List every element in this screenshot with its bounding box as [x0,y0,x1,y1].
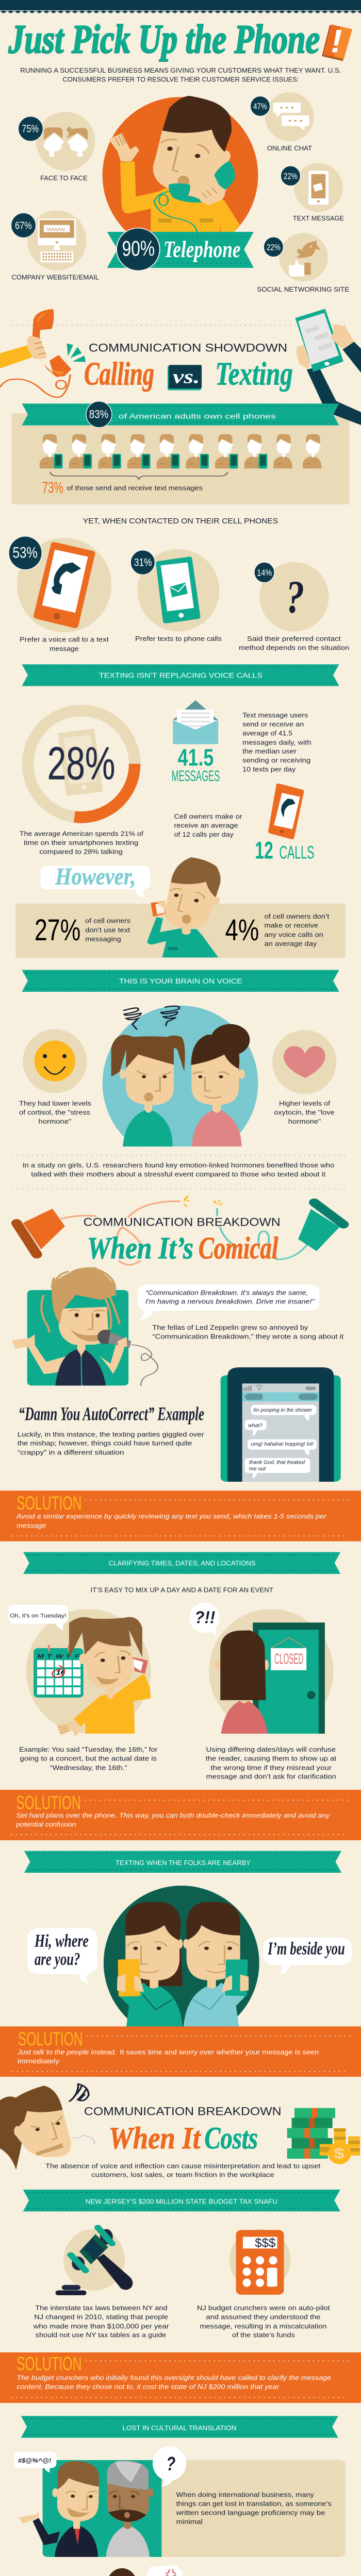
stat: 4%: 4% [225,913,259,947]
speech bubble: however [41,863,150,897]
ribbon: lost in cultural translation [21,2416,338,2438]
panel: non-users [15,904,346,958]
text: cell owners 12 calls: receive an average [174,822,238,829]
text: messages daily: 10 texts per day [242,766,296,773]
stat: 73% send and receive text: of those send and receive text messages [67,485,203,492]
text: differing dates [206,1746,337,1781]
icon: stress scribble left [123,1008,141,1029]
heading: communication breakdown costs: COMMUNICATION BREAKDOWN [84,2105,282,2118]
stat: 27%: of cell owners [85,918,130,925]
chart: 28% ring [22,705,140,823]
ribbon: new jersey snafu [23,2190,340,2211]
caption: depends on situation: Said their preferred contact [247,635,341,642]
text: messages daily: send or receive an [242,721,304,728]
text: MESSAGES [172,768,220,785]
caption: prefer a voice call: message [50,645,79,653]
icon: calculator [229,2229,290,2295]
heading: when it costs: Costs [204,2122,258,2156]
text: budget crunchers: of the state’s funds [232,2332,295,2339]
icon: ring burst [67,344,86,362]
text: luckily: “crappy” in a different situation [18,1449,124,1456]
illustration: girl with calendar: W [56,1653,64,1659]
caption: oxytocin: hormone" [288,1118,321,1125]
ribbon: clarifying times [23,1552,340,1574]
text: interstate tax laws: who made more than $100,000 per year [33,2323,169,2330]
text: interstate tax laws: The interstate tax laws between NY and [35,2304,168,2312]
ribbon: texting when folks nearby [24,1851,341,1873]
text: luckily: Luckily, in this instance, the texting parties giggled over [18,1431,204,1438]
ribbon: 90% telephone: 90% [122,236,155,261]
icon: 31% text phone: 31% [134,556,152,568]
panel: solution 3: Just talk to the people instead. [17,2048,117,2056]
icon: orange phone 12 calls [268,784,304,839]
label: text message: TEXT MESSAGE [293,215,344,222]
icon: angry puff [73,2136,94,2144]
speech bubble: question [153,2446,186,2487]
caption: prefer a voice call [20,636,109,653]
panel: solution 2: SOLUTION [16,1792,81,1814]
text: messages daily: average of 41.5 [242,730,292,737]
illustration: girl with calendar: F [75,1653,80,1659]
intro text [20,67,341,83]
icon: 53% voice call phone: 53% [13,545,38,561]
text: interstate tax laws: should not use NY tax tables as a guide [36,2332,166,2339]
text: messages daily: messages daily, with [242,739,311,747]
speech bubble: oh it's on tuesday [9,1605,68,1630]
text: CALLS [280,842,314,862]
text: international business [176,2491,332,2526]
ribbon: 83% own cell phones: of American adults own cell phones [119,412,276,420]
illustration: angry woman [0,2086,71,2170]
speech bubble: hi where are you: are you? [35,1949,80,1969]
brace [50,472,227,480]
speech bubble: quote: I'm having a nervous breakdown. Drive me insane!” [145,1298,315,1306]
stat: 41.5 messages [172,744,220,785]
icon: 53% voice call phone [9,536,111,632]
icon: text message 22%: 22% [284,172,298,181]
text: tuesday the 16th example [19,1746,157,1772]
text: interstate tax laws [33,2304,169,2339]
illustration: singer with microphone [11,1268,158,1386]
caption: oxytocin: Higher levels of [279,1100,331,1107]
panel: solution 4: SOLUTION [17,2353,81,2375]
icon: sparks [183,1195,224,1207]
icon: text message 22% [281,163,343,212]
text: differing dates: the reader, causing them to show up at [206,1755,337,1762]
icon: online chat 47%: 47% [253,102,267,111]
text: differing dates: message and don’t ask for clarification [206,1773,336,1781]
icon: megaphone lines [60,1201,307,1265]
illustration: woman at closed door [209,1609,333,1734]
stat: 27%: messaging [85,936,121,943]
icon: exclamation phone [322,23,352,61]
text: cell owners 12 calls: Cell owners make or [174,813,242,820]
ribbon: texting isn't replacing voice calls [22,664,339,686]
illustration: hands with tablet [295,309,361,425]
ribbon: this is your brain on voice [22,970,339,992]
text: international business: minimal [176,2518,203,2526]
icon: 14% question mark: ? [286,571,304,623]
text: messages daily [242,712,311,773]
caption: cortisol: They had lower levels [19,1100,91,1107]
label: face to face: FACE TO FACE [40,175,88,182]
panel: solution 3 [0,2026,361,2077]
icon: heart [272,1030,336,1094]
ribbon: clarifying times: CLARIFYING TIMES, DATES, AND LOCATIONS [109,1560,256,1567]
icon: smiley [23,1029,87,1093]
panel: cell ownership [11,413,349,504]
panel: idioms [43,2568,346,2576]
ribbon: 90% telephone [107,228,254,270]
text: messages daily: Text message users [242,712,308,719]
ribbon: lost in cultural translation: LOST IN CULTURAL TRANSLATION [123,2425,236,2432]
caption: prefer a voice call: Prefer a voice call to a text [20,636,109,643]
caption: oxytocin [274,1100,335,1125]
panel: solution 1: SOLUTION [17,1493,81,1514]
icon: stress scribble right [161,1006,179,1026]
stat: 73% send and receive text: 73% [42,479,63,496]
panel: solution 4: content. Because they chose not to, it cost the state of NJ $200 million that year [17,2383,280,2391]
icon: online chat 47% [250,92,314,141]
icon: gavel [56,2227,133,2295]
speech bubble: swearing [14,2452,56,2472]
illustration: man on phone [147,857,221,957]
text: led zeppelin: The fellas of Led Zeppelin grew so annoyed by [153,1324,308,1331]
speech bubble: quote [138,1284,319,1320]
chart: 28% ring: 28% [47,737,115,789]
icon: money and coins: $ [334,2145,344,2162]
speech bubble: oh it's on tuesday: Oh, it’s on Tuesday! [10,1612,67,1619]
icon: money and coins [287,2108,360,2164]
text: led zeppelin [153,1324,344,1341]
panel: solution 3: SOLUTION [18,2028,83,2049]
illustration: girl with calendar: M [37,1653,44,1659]
speech bubble: quote: “Communication Breakdown. It's always the same, [145,1289,308,1297]
text: study on girls [23,1162,334,1178]
text: budget crunchers: message, resulting in a miscalculation [200,2323,326,2330]
stat: 4%: of cell owners don’t [265,913,330,920]
icon: face to face 75%: 75% [22,123,39,135]
caption: cortisol [19,1100,91,1125]
text: interstate tax laws: NJ changed in 2010, stating that people [34,2314,168,2321]
panel: solution 3: immediately [18,2058,59,2065]
main illustration: man on telephone [103,96,258,253]
caption: cortisol: hormone" [39,1118,71,1125]
text: 21% texting vs 28% talking: time on their smartphones texting [24,839,138,846]
text: absence of voice: customers, lost sales, or team friction in the workplace [91,2172,274,2179]
stat: 4%: make or receive [265,922,318,929]
text: luckily: the mishap; however, things could have turned quite [18,1440,192,1447]
ribbon: new jersey snafu: NEW JERSEY’S $200 MILLION STATE BUDGET TAX SNAFU [86,2198,277,2206]
icon: orange can [17,1209,65,1255]
top zigzag band [0,0,361,13]
text: 21% texting vs 28% talking: compared to 28% talking [39,848,123,856]
badge: vs: vs. [173,365,200,387]
text: cell owners 12 calls [174,813,242,838]
icon: scribble [69,2084,89,2102]
ribbon: 90% telephone: Telephone [163,236,241,262]
panel: international business [19,2460,346,2557]
panel: solution 1 [0,1490,361,1541]
text: luckily [18,1431,204,1456]
stat: 27%: 27% [35,913,80,947]
text: differing dates: Using differing dates/days will confuse [206,1746,336,1753]
stat: 4%: any voice calls on [265,931,323,939]
speech bubble: i'm beside you [263,1938,352,1975]
text: messages daily: sending or receiving [242,757,310,764]
text: international business: things can get lost in translation, as someone’s [176,2500,332,2507]
text: budget crunchers: and assumed they understood the [206,2314,320,2321]
text: tuesday the 16th example: going to a concert, but the actual date is [20,1755,157,1762]
text: budget crunchers: NJ budget crunchers were on auto-pilot [197,2304,330,2312]
icon: hand holding orange handset [0,309,71,397]
subheading: YET, WHEN CONTACTED ON THEIR CELL PHONES [83,517,278,525]
ribbon: 83% own cell phones [22,401,339,428]
icon: 31% text phone [130,549,219,632]
chart: ten person pictogram, eight with phones [40,434,322,468]
text: 21% texting vs 28% talking [20,830,143,856]
heading: when it's comical: When It’s [87,1231,193,1265]
speech bubble: however: However, [55,863,136,890]
illustration: two girls [103,1006,258,1146]
heading: communication breakdown: COMMUNICATION BREAKDOWN [84,1215,281,1228]
panel: solution 3: It saves time and worry over whether your message is seen [120,2048,319,2056]
speech bubble: hi where are you: Hi, where [34,1930,89,1951]
caption: cortisol: of cortisol, the "stress [19,1109,90,1116]
heading: calling: Calling [84,356,154,392]
label: online chat: ONLINE CHAT [267,145,312,152]
text: international business: written second language proficiency may be [176,2510,325,2517]
icon: 14% question mark: 14% [257,568,272,578]
speech bubble: hi where are you [28,1928,97,1984]
ribbon: texting when folks nearby: TEXTING WHEN THE FOLKS ARE NEARBY [116,1859,251,1867]
illustration: girl with calendar [26,1609,151,1735]
text: absence of voice [45,2162,321,2179]
heading: communication showdown: COMMUNICATION SHOWDOWN [89,341,287,354]
illustration: girl with calendar: T [47,1653,53,1659]
stat: 27%: don’t use text [85,926,130,934]
icon: social networking 22% [264,233,328,281]
speech bubble: confused: ?!! [194,1608,215,1627]
text: cell owners 12 calls: of 12 calls per day [174,831,234,838]
icon: teal can [298,1202,343,1251]
illustration: woman at closed door: CLOSED [274,1651,303,1667]
icon: face to face 75% [18,112,95,171]
ribbon: this is your brain on voice: THIS IS YOUR BRAIN ON VOICE [119,977,242,985]
heading: texting: Texting [215,356,293,392]
illustration: phone autocorrect chat: thank God. that freaked [249,1459,305,1465]
ribbon: texting isn't replacing voice calls: TEXTING ISN’T REPLACING VOICE CALLS [99,671,262,680]
caption: oxytocin: oxytocin, the "love [274,1109,335,1116]
icon: company website 67% [11,210,86,270]
illustration: phone autocorrect chat: me out [249,1466,266,1472]
caption: depends on situation [239,635,349,652]
text: differing dates: the wrong time if they misread your [210,1764,332,1772]
illustration: girl with calendar: 16 [56,1670,65,1676]
illustration: phone autocorrect chat [221,1367,341,1482]
icon: exclamation phone: ! [331,23,342,59]
icon: company website 67%: 67% [15,220,32,231]
icon: company website 67%: www. [46,226,67,232]
label: company website: COMPANY WEBSITE/EMAIL [11,274,99,281]
text: 21% texting vs 28% talking: The average American spends 21% of [20,830,143,838]
text: messages daily: the median user [242,748,297,755]
illustration: phone autocorrect chat: what? [248,1422,262,1429]
text: international business: When doing international business, many [176,2491,314,2499]
stat: 4% [225,913,330,947]
text: absence of voice: The absence of voice and inflection can cause misinterpretation and lead to upset [45,2162,321,2170]
heading: when it costs: When It [109,2122,201,2156]
icon: 14% question mark [254,562,329,632]
text: budget crunchers [197,2304,330,2339]
illustration: phone autocorrect chat: Im pooping in the shower [253,1407,313,1413]
illustration: phone autocorrect chat: omg! hahaha! hopping! lol! [251,1441,314,1447]
icon: calculator: $$$ [255,2236,276,2250]
speech bubble: swearing: #$@%^@! [18,2458,51,2464]
icon: envelope [173,700,218,744]
panel: solution 1: message [17,1522,46,1530]
speech bubble: confused [189,1603,219,1636]
text: tuesday the 16th example: “Wednesday, the 16th.” [50,1764,127,1772]
stat: 4%: an average day [265,940,317,947]
stat: 12 calls [255,837,314,864]
ribbon: 83% own cell phones: 83% [89,408,108,421]
caption: prefer texts: Prefer texts to phone calls [135,635,222,642]
heading: when it's comical: Comical [199,1231,278,1265]
speech bubble: offended [136,2565,183,2576]
stat: 41.5 messages: 41.5 [178,744,214,771]
stat: 73% send and receive text [42,479,203,496]
panel: solution 2 [0,1790,361,1840]
stat: 12 calls: 12 [255,837,273,864]
illustration: girl with calendar: T [66,1653,72,1659]
speech bubble: question: ? [166,2452,175,2475]
panel: solution 4 [0,2352,361,2403]
panel: solution 2: potential confusion [15,1821,76,1828]
subheading: IT’S EASY TO MIX UP A DAY AND A DATE FOR AN EVENT [90,1587,273,1594]
icon: social networking 22%: 22% [267,243,281,252]
text: tuesday the 16th example: Example: You said “Tuesday, the 16th,” for [19,1746,157,1753]
illustration: two people texting side by side [104,1886,259,2040]
